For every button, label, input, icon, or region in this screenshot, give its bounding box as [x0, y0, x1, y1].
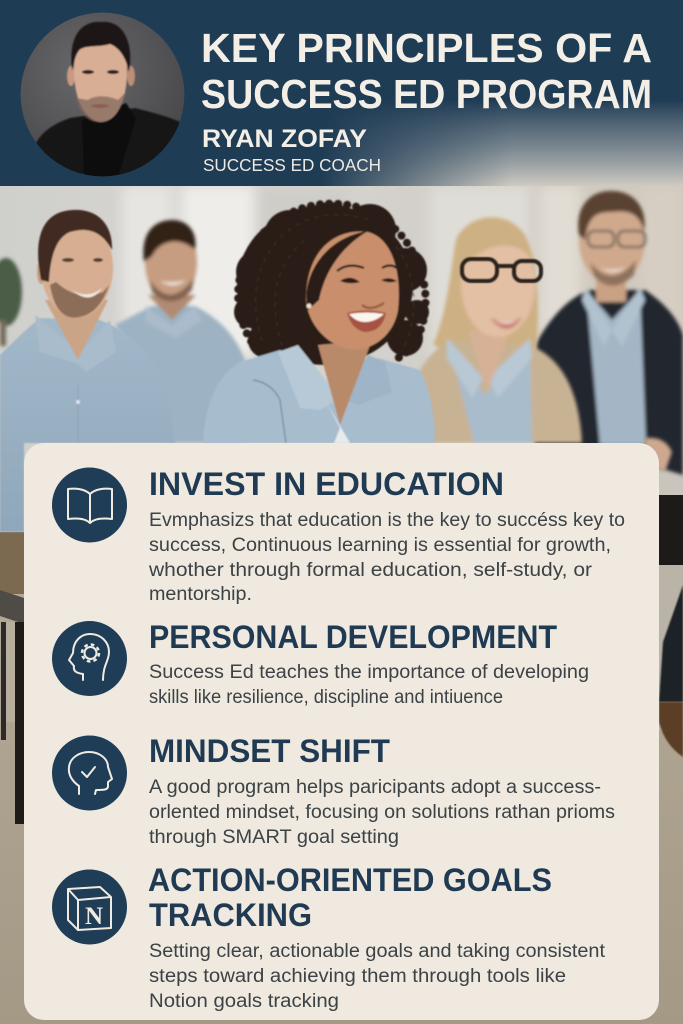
heading: MINDSET SHIFT — [149, 733, 390, 769]
title: KEY PRINCIPLES OF A — [201, 25, 652, 71]
title — [201, 25, 652, 117]
icon: notion cube: N — [85, 903, 103, 930]
title: SUCCESS ED PROGRAM — [201, 71, 652, 117]
body text — [149, 662, 589, 708]
header band — [0, 0, 683, 186]
heading: ACTION-ORIENTED GOALS — [148, 862, 552, 898]
body text: whother through formal education, self-study, or — [148, 560, 593, 581]
body text — [149, 777, 615, 848]
body text: success, Continuous learning is essential for growth, — [149, 535, 611, 556]
body text — [149, 941, 606, 1012]
principle: mindset shift — [52, 733, 615, 848]
presenter role: SUCCESS ED COACH — [203, 155, 381, 175]
icon: notion cube — [52, 870, 127, 944]
body text — [148, 510, 625, 605]
icon: head with check mark — [52, 736, 127, 810]
heading: INVEST IN EDUCATION — [149, 466, 504, 502]
body text: skills like resilience, discipline and intiuence — [149, 687, 503, 708]
blonde woman — [403, 217, 582, 443]
icon: head with gear — [52, 621, 127, 696]
right man — [535, 191, 683, 475]
body text: Evmphasizs that education is the key to succéss key to — [149, 510, 625, 531]
body text: Notion goals tracking — [149, 991, 339, 1012]
principle: personal development — [52, 619, 589, 708]
body text: mentorship. — [149, 584, 252, 605]
body text: orlented mindset, focusing on solutions rathan prioms — [149, 802, 615, 823]
body text: Success Ed teaches the importance of developing — [149, 662, 589, 683]
portrait photo of Ryan Zofay — [20, 12, 184, 180]
back left man — [115, 220, 246, 443]
panel: principles card — [24, 443, 659, 1020]
heading: TRACKING — [149, 897, 312, 933]
curl texture — [238, 204, 426, 358]
floor and chairs — [0, 460, 683, 1024]
body text: through SMART goal setting — [149, 827, 399, 848]
plant — [0, 258, 22, 346]
body text: Setting clear, actionable goals and taking consistent — [149, 941, 606, 962]
body text: steps toward achieving them through tools like — [149, 966, 566, 987]
body text: A good program helps paricipants adopt a success- — [149, 777, 601, 798]
principle: invest in education — [52, 466, 625, 605]
glasses — [462, 259, 541, 281]
heading — [148, 862, 552, 933]
front left man — [0, 210, 175, 532]
principle: action-oriented goals tracking — [52, 862, 606, 1012]
heading: PERSONAL DEVELOPMENT — [149, 619, 557, 655]
icon: open book — [52, 468, 127, 542]
presenter name: RYAN ZOFAY — [202, 125, 367, 153]
center woman with curly hair — [203, 202, 435, 443]
